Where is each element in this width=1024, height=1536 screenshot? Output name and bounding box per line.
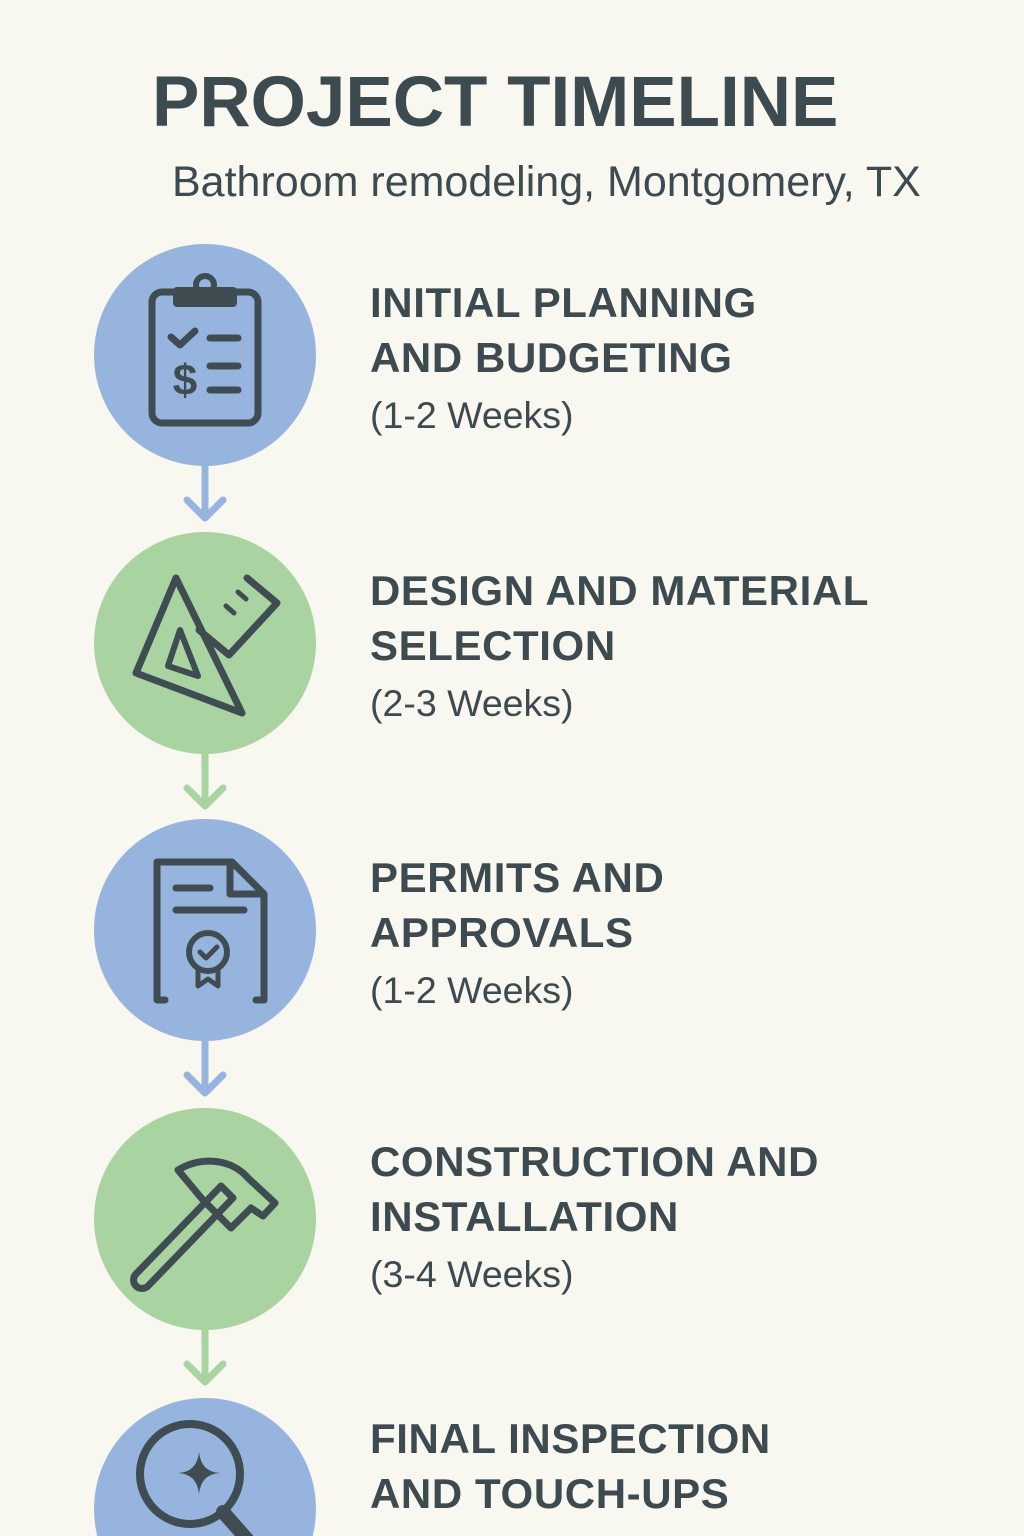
arrow 3 bbox=[187, 1041, 223, 1093]
step 4 text: (3-4 Weeks) bbox=[370, 1253, 574, 1295]
step 4 text: CONSTRUCTION AND bbox=[370, 1138, 819, 1185]
step 1 text: AND BUDGETING bbox=[370, 334, 732, 381]
step 4 text: INSTALLATION bbox=[370, 1193, 679, 1240]
step 5 circle and icon: magnifier bbox=[94, 1398, 316, 1536]
arrow 4 bbox=[187, 1330, 223, 1382]
title: PROJECT TIMELINE bbox=[152, 63, 838, 142]
step 1 text: (1-2 Weeks) bbox=[370, 394, 574, 436]
step 2 text: (2-3 Weeks) bbox=[370, 682, 574, 724]
step 3 text: (1-2 Weeks) bbox=[370, 969, 574, 1011]
step 1 circle and icon: clipboard: $ bbox=[173, 356, 197, 405]
step 2 text bbox=[370, 567, 869, 724]
step 1 text bbox=[370, 279, 757, 436]
step 5 text: FINAL INSPECTION bbox=[370, 1415, 771, 1462]
step 2 circle and icon: set square and ruler bbox=[94, 532, 316, 754]
step 2 text: DESIGN AND MATERIAL bbox=[370, 567, 869, 614]
step 5 text bbox=[370, 1415, 771, 1517]
step 5 text: AND TOUCH-UPS bbox=[370, 1470, 729, 1517]
step 3 circle and icon: permit document bbox=[94, 819, 316, 1041]
step 3 text bbox=[370, 854, 664, 1011]
step 4 circle and icon: hammer bbox=[94, 1108, 316, 1330]
step 3 text: APPROVALS bbox=[370, 909, 634, 956]
step 3 text: PERMITS AND bbox=[370, 854, 664, 901]
step 4 text bbox=[370, 1138, 819, 1295]
step 1 text: INITIAL PLANNING bbox=[370, 279, 757, 326]
arrow 2 bbox=[187, 754, 223, 806]
step 1 circle and icon: clipboard bbox=[94, 244, 316, 466]
subtitle: Bathroom remodeling, Montgomery, TX bbox=[172, 158, 921, 206]
arrow 1 bbox=[187, 466, 223, 518]
step 2 text: SELECTION bbox=[370, 622, 616, 669]
